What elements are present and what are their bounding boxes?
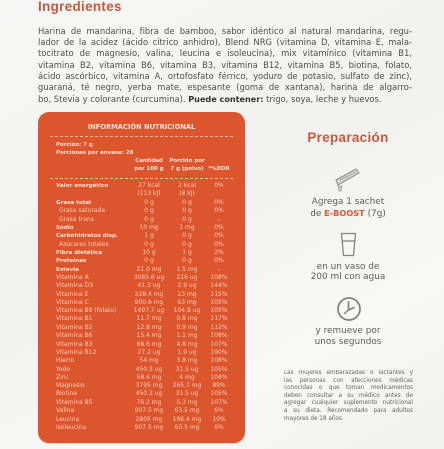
nutrition table rows: Magnesio	[56, 382, 85, 389]
nutrition table rows: Vitamina A	[56, 274, 89, 281]
nutrition table rows: 27.2 ug	[138, 348, 160, 356]
nutrition table rows: Vitamina B6	[56, 332, 93, 339]
icon: clock	[337, 297, 361, 321]
text block: ingredients list: bo, Stevia y colorante (curcumina). Puede contener: trigo, soya, leche y huevos.	[38, 94, 382, 104]
nutrition table rows: 104%	[210, 374, 228, 381]
text: step 3: y remueve por	[316, 326, 380, 336]
nutrition table rows: 0 g	[144, 216, 154, 223]
text block: warning: deben consultar a su médico antes de	[284, 393, 413, 399]
nutrition table rows: 115%	[210, 290, 228, 298]
text block: warning: las personas con afecciones médicas	[284, 378, 413, 384]
nutrition table rows: 2805 mg	[136, 416, 162, 422]
nutrition table rows: Vitamina D3	[56, 282, 93, 289]
nutrition table rows: 105%	[210, 298, 228, 306]
text block: warning	[284, 370, 413, 422]
table header: Porción por	[169, 158, 205, 164]
nutrition table rows: 10 mg	[139, 224, 159, 231]
nutrition table rows: 1 g	[144, 232, 154, 239]
nutrition table rows: 3085.6 ug	[134, 274, 164, 281]
text: step 3: unos segundos	[315, 337, 381, 347]
nutrition table rows: (113 kJ)	[137, 190, 161, 197]
nutrition table rows: 107%	[210, 399, 228, 406]
nutrition table rows: Biotina	[56, 390, 77, 397]
nutrition table rows: 4.8 mg	[176, 340, 198, 348]
nutrition table rows: 63 mg	[177, 298, 197, 306]
nutrition table rows: Zinc	[56, 374, 69, 381]
nutrition table rows: 0 g	[182, 232, 192, 239]
serving information: Porción: 7 g	[56, 142, 93, 148]
nutrition table rows: 0 g	[182, 240, 192, 248]
nutrition table rows: 144%	[210, 282, 228, 289]
nutrition table rows: 10%	[212, 416, 226, 422]
nutrition table rows: 0%	[214, 257, 224, 264]
text block: ingredients list	[38, 26, 412, 104]
nutrition table rows: 31.5 ug	[176, 366, 198, 372]
nutrition table rows: 196.4 mg	[173, 416, 201, 422]
nutrition table rows: Vitamina B9 (folato)	[56, 307, 116, 314]
serving information: Porciones por envase: 28	[56, 150, 133, 156]
nutrition table rows: Grasa saturada	[59, 207, 105, 214]
text: step 1	[310, 197, 386, 219]
nutrition table rows: 0 g	[144, 257, 154, 264]
nutrition table rows: 4 mg	[179, 374, 195, 381]
nutrition table rows: 900.6 mg	[135, 298, 163, 306]
nutrition table rows: 0 g	[144, 207, 154, 214]
nutrition table rows: 0%	[214, 224, 224, 231]
heading: Preparación: Preparación	[307, 130, 389, 145]
table header	[134, 158, 230, 172]
nutrition table rows: 1.5 mg	[176, 266, 198, 272]
nutrition table rows: 0 g	[182, 257, 192, 264]
text block: ingredients list: guaraná, té negro, yerba mate, espesante (goma de xantana), harina de algarro-	[38, 82, 412, 92]
nutrition table rows: 89%	[212, 382, 226, 389]
nutrition table rows: 1.1 mg	[176, 332, 198, 339]
nutrition table rows: 41.3 ug	[138, 282, 160, 289]
nutrition table rows: 68.6 mg	[137, 340, 161, 348]
nutrition table rows: 105%	[210, 307, 228, 314]
text block: ingredients list: vitamina B2, vitamina B6, vitamina B3, vitamina B12, vitamina B5, biotina, folato,	[38, 60, 412, 70]
nutrition table rows: Hierro	[56, 357, 74, 364]
table header: *%DDR	[208, 166, 230, 172]
text block: ingredients list: Harina de mandarina, fibra de bamboo, sabor idéntico al natural mandarina, regu-	[38, 26, 412, 36]
nutrition table rows: 21.0 mg	[137, 266, 161, 272]
nutrition table rows: 0%	[214, 240, 224, 248]
nutrition table rows: Vitamina C	[56, 298, 89, 306]
text block: warning: mayores de 18 años.	[284, 416, 344, 422]
nutrition table rows: 3795 mg	[136, 382, 162, 389]
nutrition table rows: Carbohidratos disp.	[56, 233, 118, 239]
nutrition table rows: 11.7 mg	[137, 315, 161, 322]
nutrition table rows: Azúcares totales	[59, 240, 109, 248]
nutrition table rows: Fibra dietética	[56, 250, 102, 256]
nutrition table rows: 27 kcal	[138, 182, 160, 189]
nutrition table rows: Grasa total	[56, 200, 91, 206]
nutrition table rows: 1 mg	[179, 224, 195, 231]
text block: warning: a su dieta. Recomendado para adultos	[284, 408, 413, 414]
nutrition table rows: 58.4 mg	[137, 374, 161, 381]
text: step 1: de E-BOOST (7g)	[310, 208, 386, 219]
nutrition table rows: 108%	[210, 274, 228, 281]
nutrition table rows: 0%	[214, 232, 224, 239]
nutrition table rows: 12.8 mg	[137, 324, 161, 330]
nutrition table rows: 1 g	[182, 249, 192, 256]
nutrition table rows: 6%	[214, 424, 224, 431]
nutrition table rows: 107%	[210, 340, 228, 348]
nutrition table rows: 3.8 mg	[176, 357, 198, 364]
nutrition table rows: 63.5 mg	[175, 424, 199, 431]
text: step 2	[311, 262, 385, 282]
nutrition table rows: 23 mg	[177, 290, 197, 298]
nutrition table rows: 76.2 mg	[137, 399, 161, 406]
nutrition table rows: Yodo	[56, 366, 70, 372]
nutrition table rows: Proteínas	[56, 258, 86, 264]
nutrition table rows: 15.4 mg	[137, 332, 161, 339]
text block: ingredients list: tocitrato de magnesio, valina, leucina e isoleucina), mix vitamínico (vitamina B1,	[38, 48, 412, 58]
nutrition table rows: 0 g	[182, 207, 192, 214]
nutrition table rows: 450.3 ug	[136, 366, 162, 372]
nutrition table rows: 328.4 mg	[135, 290, 163, 298]
nutrition table rows: 190%	[210, 348, 228, 356]
nutrition table rows: 0%	[214, 199, 224, 206]
nutrition table rows: 54 mg	[139, 357, 159, 364]
nutrition table rows: -	[218, 266, 220, 272]
nutrition table rows	[56, 182, 228, 431]
nutrition table rows: 1.9 ug	[177, 348, 197, 356]
nutrition table rows: 0 g	[182, 199, 192, 206]
nutrition table rows: 0 g	[144, 240, 154, 248]
nutrition table rows: 0.9 mg	[176, 324, 198, 330]
text block: ingredients list: lador de la acidez (ácido cítrico anhidro), Blend NRG (vitamina D, vitamina E, mala-	[38, 37, 412, 47]
nutrition table rows: Vitamina B2	[56, 324, 93, 330]
panel heading: INFORMACIÓN NUTRICIONAL	[88, 123, 195, 131]
text: step 2: en un vaso de	[317, 262, 379, 272]
nutrition table rows: 6%	[214, 407, 224, 414]
nutrition table rows: Isoleucina	[56, 424, 86, 431]
nutrition table rows: 104.8 ug	[174, 307, 200, 314]
nutrition table rows: Vitamina B12	[56, 348, 96, 356]
nutrition table rows: 105%	[210, 366, 228, 372]
text: step 3	[315, 326, 381, 347]
nutrition table rows: 216 ug	[177, 274, 197, 281]
nutrition table rows: 108%	[210, 332, 228, 339]
table header: 7 g (polvo)	[170, 166, 204, 172]
nutrition table rows: Sodio	[56, 225, 74, 231]
table header: Cantidad	[135, 158, 163, 164]
serving information	[56, 142, 134, 156]
text: step 1: Agrega 1 sachet	[312, 197, 384, 207]
nutrition table rows: Vitamina E	[56, 290, 88, 298]
nutrition table rows: 2.9 ug	[177, 282, 197, 289]
nutrition table rows: Valina	[56, 407, 74, 414]
nutrition table rows: 1497.7 ug	[134, 307, 164, 314]
nutrition table rows: 2 kcal	[178, 182, 196, 189]
table header: por 100 g	[134, 166, 164, 172]
text block: warning: conocidas o que toman medicamentos	[284, 385, 413, 391]
nutrition table rows: 31.5 ug	[176, 390, 198, 397]
nutrition table rows: 108%	[210, 357, 228, 364]
nutrition table rows: Estevia	[56, 266, 79, 272]
nutrition table rows: 2%	[214, 249, 224, 256]
nutrition table rows: Vitamina B1	[56, 315, 93, 322]
nutrition table rows: 63.5 mg	[175, 407, 199, 414]
nutrition table rows: 907.5 mg	[135, 424, 163, 431]
nutrition table rows: Leucina	[56, 416, 79, 422]
text block: warning: agregar cualquier suplemento nutricional	[284, 400, 413, 406]
nutrition table rows: -	[218, 216, 220, 223]
nutrition table rows: 265.7 mg	[173, 382, 201, 389]
text block: ingredients list: ácido ascórbico, vitamina A, ortofosfato férrico, yoduro de potasio, sulfato de zinc),	[38, 71, 412, 81]
nutrition table rows: 112%	[210, 324, 228, 330]
nutrition table rows: 450.3 ug	[136, 390, 162, 397]
nutrition table rows: 117%	[210, 315, 228, 322]
nutrition table rows: (8 kJ)	[179, 190, 195, 197]
nutrition table rows: 5.3 mg	[176, 399, 198, 406]
nutrition table rows: 105%	[210, 390, 228, 397]
nutrition table rows: 0%	[214, 182, 224, 189]
nutrition table rows: 0%	[214, 207, 224, 214]
nutrition table rows: Vitamina B5	[56, 399, 93, 406]
nutrition table rows: 0 g	[182, 216, 192, 223]
panel: nutrition information	[38, 112, 245, 443]
nutrition table rows: Valor energético	[56, 183, 108, 189]
text: step 2: 200 ml con agua	[311, 272, 385, 282]
icon: glass of water	[340, 232, 356, 256]
nutrition table rows: 0.8 mg	[176, 315, 198, 322]
text block: warning: Las mujeres embarazadas o lactantes y	[284, 370, 413, 376]
nutrition table rows: 10 g	[142, 249, 156, 256]
nutrition table rows: Vitamina B3	[56, 340, 93, 348]
nutrition table rows: 0 g	[144, 199, 154, 206]
icon: sachet	[335, 168, 360, 192]
nutrition table rows: Grasa trans	[59, 216, 94, 223]
nutrition table rows: 907.5 mg	[135, 407, 163, 414]
